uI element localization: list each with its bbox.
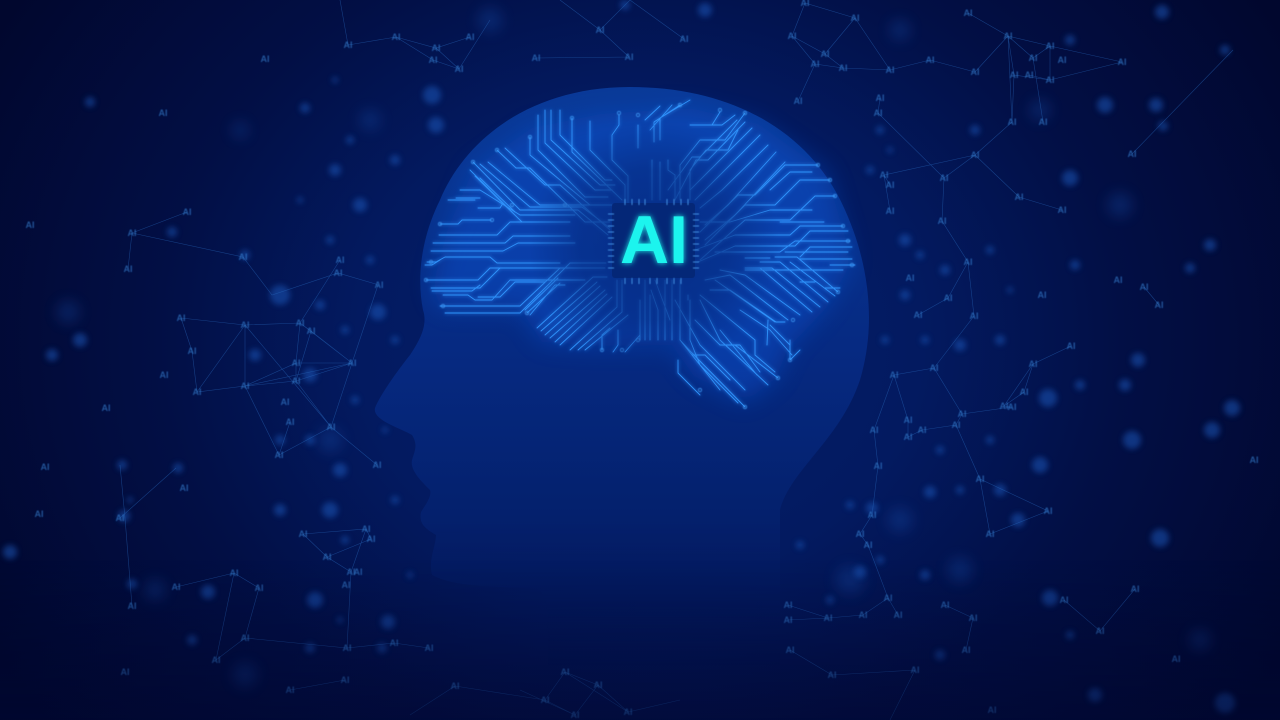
AI node labels: AI (1114, 275, 1122, 285)
AI node labels: AI (1014, 192, 1024, 202)
AI node labels: AI (958, 409, 966, 419)
AI node labels: AI (230, 568, 238, 578)
AI node labels: AI (1118, 57, 1126, 67)
AI node labels: AI (1010, 70, 1018, 80)
AI node labels: AI (176, 313, 186, 323)
AI node labels: AI (1058, 205, 1066, 215)
AI node labels: AI (344, 40, 352, 50)
AI node labels: AI (820, 49, 830, 59)
network: upper right (792, 3, 1233, 368)
AI node labels: AI (260, 54, 270, 64)
AI node labels: AI (1044, 506, 1052, 516)
AI node labels: AI (180, 483, 188, 493)
AI node labels: AI (334, 268, 342, 278)
AI node labels: AI (904, 415, 912, 425)
AI node labels: AI (938, 216, 946, 226)
AI node labels: AI (1250, 455, 1258, 465)
AI node labels: AI (1154, 300, 1164, 310)
chip label: AI (620, 202, 688, 278)
south traces (602, 280, 690, 352)
AI node labels: AI (432, 43, 440, 53)
AI node labels: AI (962, 645, 970, 655)
AI node labels: AI (1024, 70, 1034, 80)
AI node labels: AI (1060, 595, 1068, 605)
AI node labels: AI (930, 363, 938, 373)
AI node labels: AI (390, 638, 398, 648)
AI node labels: AI (374, 280, 384, 290)
AI node labels: AI (1000, 401, 1008, 411)
AI node labels: AI (296, 318, 304, 328)
southwest fan (525, 277, 628, 350)
chip pins (608, 199, 699, 284)
AI node labels: AI (926, 55, 934, 65)
AI node labels: AI (1066, 341, 1076, 351)
AI node labels: AI (116, 513, 124, 523)
top traces (530, 100, 690, 205)
AI node labels: AI (354, 567, 362, 577)
AI node labels: AI (1004, 31, 1012, 41)
AI node labels: AI (970, 67, 980, 77)
AI node labels: AI (824, 613, 832, 623)
AI node labels: AI (158, 108, 168, 118)
AI node labels: AI (868, 510, 876, 520)
east lobe traces (695, 165, 855, 270)
AI node labels: AI (1140, 282, 1148, 292)
AI node labels: AI (886, 206, 894, 216)
AI node labels: AI (940, 173, 948, 183)
AI node labels: AI (1008, 117, 1016, 127)
AI node labels: AI (856, 529, 864, 539)
AI node labels: AI (466, 32, 474, 42)
AI node labels: AI (128, 601, 136, 611)
AI node labels: AI (1058, 55, 1066, 65)
AI node labels: AI (1028, 359, 1038, 369)
AI node labels: AI (192, 387, 202, 397)
head silhouette (375, 87, 869, 668)
AI node labels: AI (172, 582, 180, 592)
AI node labels: AI (874, 108, 882, 118)
AI node labels: AI (342, 643, 352, 653)
AI node labels: AI (940, 600, 950, 610)
AI node labels: AI (784, 615, 792, 625)
AI node labels: AI (794, 96, 802, 106)
AI node labels: AI (968, 613, 978, 623)
AI node labels: AI (1028, 53, 1038, 63)
AI node labels: AI (880, 170, 888, 180)
AI node labels: AI (838, 63, 848, 73)
west lobe traces (425, 190, 606, 313)
AI node labels: AI (1008, 402, 1016, 412)
AI node labels: AI (1020, 387, 1028, 397)
AI node labels: AI (988, 705, 996, 715)
AI node labels: AI (850, 13, 860, 23)
AI node labels: AI (340, 675, 350, 685)
AI node labels: AI (366, 534, 376, 544)
AI node labels: AI (532, 53, 540, 63)
AI node labels: AI (886, 65, 894, 75)
AI node labels: AI (348, 358, 356, 368)
AI node labels: AI (1172, 654, 1180, 664)
AI node labels: AI (428, 55, 438, 65)
AI node labels: AI (624, 707, 632, 717)
AI node labels: AI (26, 220, 34, 230)
AI node labels: AI (1046, 41, 1054, 51)
inner dimming around chip (530, 120, 780, 370)
AI node labels: AI (372, 460, 382, 470)
AI node labels: AI (560, 667, 570, 677)
AI node labels: AI (1128, 149, 1136, 159)
AI node labels: AI (346, 567, 356, 577)
AI node labels: AI (128, 228, 136, 238)
AI node labels: AI (874, 461, 882, 471)
AI node labels: AI (362, 524, 370, 534)
AI node labels: AI (944, 293, 952, 303)
AI node labels: AI (120, 667, 130, 677)
AI node labels: AI (918, 425, 926, 435)
AI node labels: AI (280, 397, 290, 407)
AI node labels: AI (890, 370, 898, 380)
AI node labels: AI (274, 450, 284, 460)
AI node labels: AI (914, 310, 922, 320)
trace end nodes (424, 103, 854, 409)
AI node labels: AI (952, 420, 960, 430)
AI node labels: AI (810, 59, 820, 69)
AI node labels: AI (624, 52, 634, 62)
AI node labels: AI (160, 370, 168, 380)
AI node labels: AI (322, 552, 332, 562)
AI node labels: AI (326, 422, 336, 432)
AI node labels: AI (336, 255, 344, 265)
AI node labels: AI (964, 257, 972, 267)
AI node labels: AI (1096, 626, 1104, 636)
AI node labels: AI (292, 358, 300, 368)
northwest fan (470, 148, 610, 235)
AI node labels: AI (254, 583, 264, 593)
AI node labels: AI (970, 311, 978, 321)
AI node labels: AI (1038, 290, 1046, 300)
AI node labels: AI (306, 326, 316, 336)
central chip (608, 199, 699, 284)
AI node labels: AI (1038, 117, 1048, 127)
AI node labels: AI (342, 580, 350, 590)
network: upper left (340, 0, 684, 69)
AI node labels: AI (904, 432, 912, 442)
AI node labels: AI (182, 207, 192, 217)
AI node labels: AI (240, 633, 250, 643)
AI node labels: AI (298, 529, 308, 539)
AI node labels: AI (292, 376, 300, 386)
network: left cluster (120, 212, 429, 690)
AI node labels: AI (870, 425, 878, 435)
network: lower right (788, 346, 1135, 720)
AI node labels: AI (594, 680, 602, 690)
AI node labels: AI (286, 685, 294, 695)
AI node labels: AI (454, 64, 464, 74)
AI node labels: AI (188, 346, 196, 356)
bottom fade (0, 560, 1280, 720)
AI node labels: AI (392, 32, 400, 42)
AI node labels: AI (212, 655, 220, 665)
AI node labels: AI (124, 264, 132, 274)
AI node labels: AI (906, 273, 914, 283)
AI node labels: AI (450, 681, 460, 691)
AI node labels: AI (970, 150, 980, 160)
AI node labels: AI (238, 252, 248, 262)
AI node labels: AI (40, 462, 50, 472)
AI node labels: AI (910, 665, 920, 675)
AI node labels: AI (540, 695, 550, 705)
AI node labels: AI (788, 31, 796, 41)
AI node labels: AI (964, 8, 972, 18)
AI node labels: AI (1046, 75, 1054, 85)
AI node labels: AI (240, 381, 250, 391)
AI node labels: AI (1130, 584, 1140, 594)
AI node labels: AI (102, 403, 110, 413)
AI node labels: AI (828, 670, 836, 680)
AI node labels: AI (986, 529, 994, 539)
AI node labels: AI (424, 643, 434, 653)
northeast fan (668, 112, 785, 240)
network: bottom center (410, 672, 680, 715)
AI node labels: AI (680, 34, 688, 44)
brain circuit traces (425, 100, 855, 407)
AI node labels: AI (876, 93, 884, 103)
lower lobe traces (675, 295, 800, 407)
AI node labels: AI (596, 25, 604, 35)
southeast fan (705, 257, 840, 322)
AI node labels: AI (858, 610, 868, 620)
AI node labels: AI (884, 593, 892, 603)
AI node labels: AI (894, 610, 902, 620)
AI node labels: AI (286, 417, 294, 427)
AI node labels: AI (240, 320, 250, 330)
chip body (612, 203, 695, 278)
AI node labels: AI (786, 645, 794, 655)
AI node labels: AI (886, 180, 894, 190)
AI node labels: AI (34, 509, 44, 519)
AI node labels: AI (784, 600, 792, 610)
brain glow (432, 108, 850, 402)
AI node labels: AI (976, 474, 984, 484)
AI node labels: AI (570, 710, 580, 720)
AI node labels: AI (864, 540, 872, 550)
